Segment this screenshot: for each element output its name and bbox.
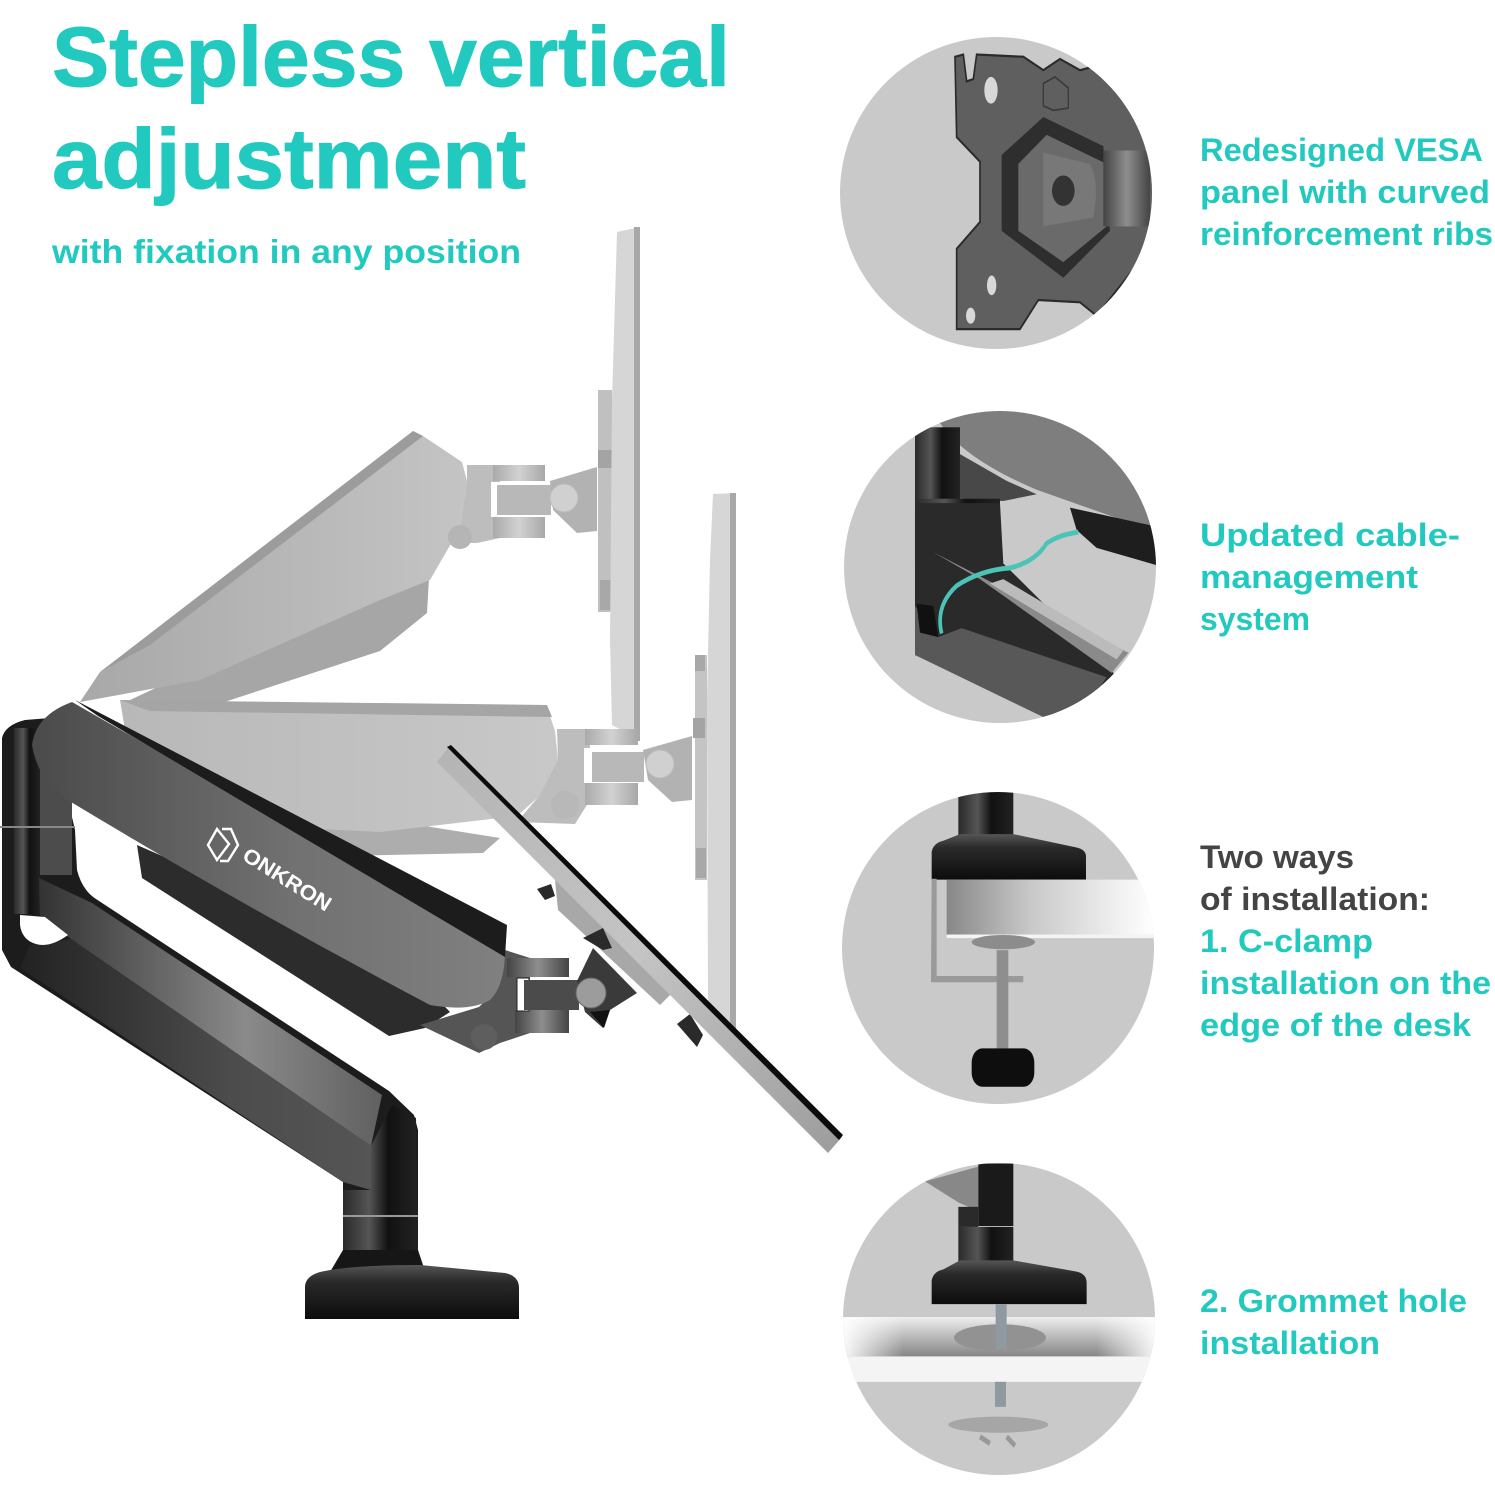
- middle VESA: [695, 655, 707, 880]
- title: adjustment: [52, 112, 526, 206]
- lower arm back: [915, 503, 1114, 716]
- base: [305, 1265, 519, 1319]
- lower arm bottom face: [20, 939, 371, 1190]
- upper support arm with logo: [32, 700, 530, 1053]
- white desk: [848, 1356, 1150, 1382]
- brand name: ONKRON: [238, 844, 335, 916]
- tilted monitor: [437, 745, 843, 1153]
- caption: grommet hole: [1200, 1283, 1467, 1361]
- detail circle: cable management: [843, 405, 1163, 730]
- hole: [954, 1324, 1046, 1351]
- top arm body: [80, 431, 467, 702]
- column: [915, 427, 960, 503]
- desk: [947, 880, 1155, 935]
- caption: VESA panel: Redesigned VESA: [1200, 132, 1483, 168]
- arm underside: [940, 411, 1152, 530]
- top wrist: [448, 465, 500, 543]
- washer: [948, 1417, 1048, 1433]
- caption: two ways of installation: of installation:: [1200, 881, 1430, 917]
- hinge barrel: [524, 980, 579, 1010]
- caption: two ways of installation: 1. C-clamp: [1200, 923, 1373, 959]
- tilted monitor screen edge: [447, 745, 843, 1140]
- caption: two ways of installation: edge of the desk: [1200, 1007, 1471, 1043]
- title: Stepless vertical: [52, 10, 730, 104]
- tilt pin: [576, 978, 606, 1008]
- knob: [972, 1048, 1034, 1087]
- column and lower arm silhouette: [2, 718, 418, 1254]
- subtitle: with fixation in any position: [51, 233, 521, 270]
- caption: cable management: Updated cable-: [1200, 517, 1460, 553]
- ghost monitor arm: middle position: [120, 493, 736, 1033]
- silver rail: [933, 552, 1128, 673]
- hinge: [1103, 151, 1150, 226]
- caption: grommet hole: 2. Grommet hole: [1200, 1283, 1467, 1319]
- hinge: dark position: [507, 948, 637, 1033]
- grommet base: [932, 1260, 1087, 1304]
- top arm tray: [130, 560, 430, 710]
- middle arm body: [120, 700, 558, 832]
- neck: [958, 792, 1014, 835]
- tilted monitor back: [437, 748, 842, 1153]
- cable slot: [20, 915, 68, 945]
- centre bracket: [1043, 153, 1096, 226]
- top VESA: [598, 390, 612, 612]
- neck: [330, 1250, 424, 1272]
- upper bolt: [996, 1304, 1007, 1350]
- caption: grommet hole: installation: [1200, 1325, 1380, 1361]
- upper black wing: [1070, 508, 1158, 566]
- column highlight: [14, 728, 40, 914]
- middle arm tray: [200, 790, 500, 856]
- dark arm face: [915, 606, 1106, 717]
- caption: cable management: [1200, 517, 1460, 637]
- dark top band: [75, 700, 507, 957]
- caption: two ways of installation: installation on the: [1200, 965, 1491, 1001]
- caption: cable management: management: [1200, 559, 1418, 595]
- caption: two ways of installation: Two ways: [1200, 839, 1354, 875]
- column: [978, 1164, 1013, 1226]
- mount holes: [987, 276, 996, 295]
- logo mark: [208, 829, 238, 861]
- mount hole lower: [966, 308, 975, 324]
- hexagon recess: [1002, 117, 1110, 278]
- caption: two ways of installation: [1200, 839, 1491, 1043]
- VESA plate: [955, 55, 1157, 329]
- threaded screw: [997, 950, 1008, 1048]
- lower arm top face: [39, 878, 382, 1146]
- tilt plate: [577, 948, 637, 1028]
- middle monitor: [707, 493, 736, 1032]
- middle wrist: [517, 729, 590, 824]
- caption: VESA panel: [1200, 132, 1493, 252]
- top hinge: [493, 465, 545, 481]
- post: [343, 1105, 418, 1254]
- arm body: [32, 702, 505, 1008]
- embossed logo: [1043, 77, 1068, 110]
- teal cable: [940, 532, 1078, 634]
- lower support arm: [0, 718, 519, 1319]
- arm segment: [925, 1167, 978, 1211]
- middle hinge: [585, 729, 638, 745]
- clamp base: [932, 834, 1086, 880]
- flange: [972, 935, 1035, 949]
- ghost monitor arm: top position: [80, 227, 640, 741]
- keyhole slot: [984, 77, 998, 104]
- caption: VESA panel: panel with curved: [1200, 174, 1490, 210]
- tray: [137, 845, 450, 1036]
- detail circle: C-clamp: [841, 785, 1155, 1105]
- top monitor: [610, 227, 640, 740]
- caption: cable management: system: [1200, 601, 1310, 637]
- clamp bracket: [931, 879, 1023, 982]
- wrist: [420, 950, 530, 1053]
- hinge brackets: [507, 958, 569, 977]
- lower bolt: [995, 1382, 1006, 1407]
- detail circle: VESA panel: [839, 36, 1157, 350]
- tilted VESA mounts: [537, 880, 703, 1047]
- title: [52, 10, 730, 206]
- wing nut: [980, 1437, 1015, 1446]
- caption: VESA panel: reinforcement ribs: [1200, 216, 1493, 252]
- detail circle: grommet: [840, 1162, 1160, 1476]
